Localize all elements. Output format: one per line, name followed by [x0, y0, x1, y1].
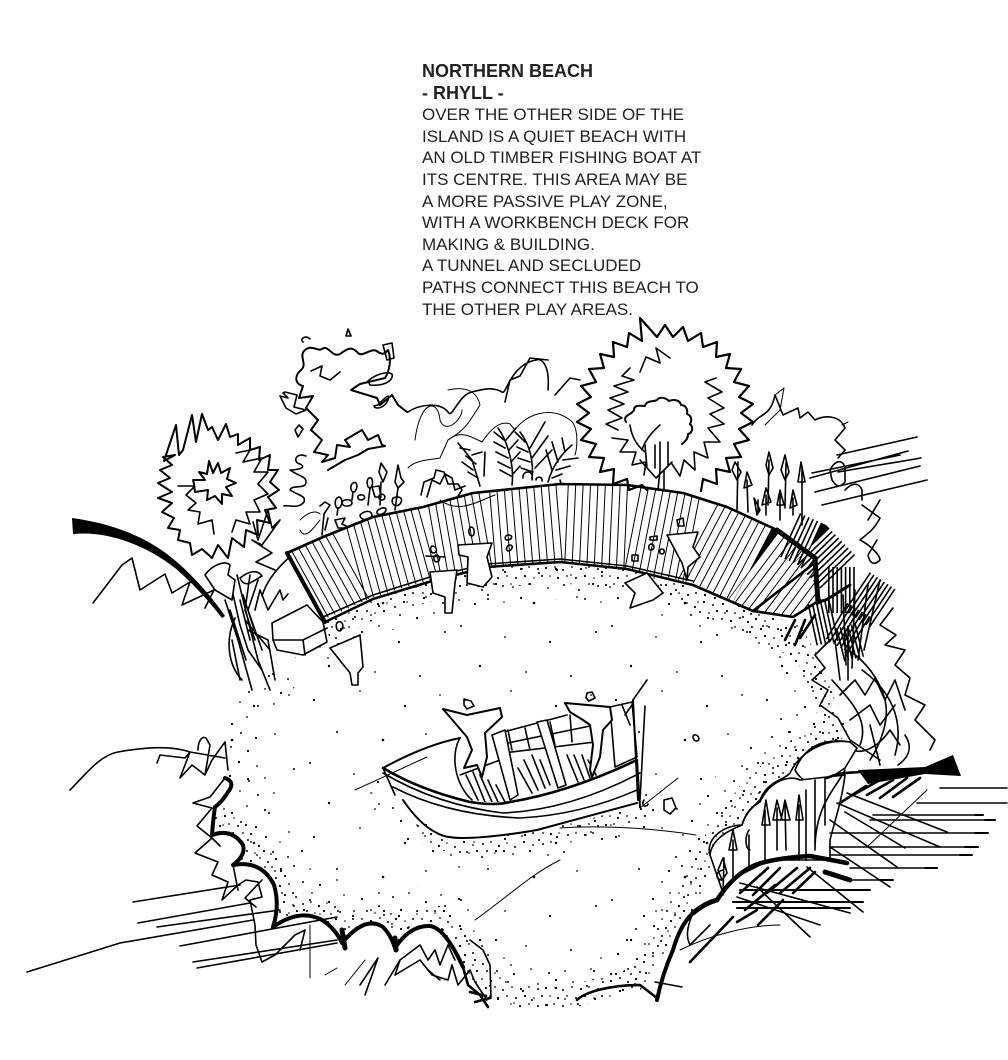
- horizontal shadow lines: right of upper bush: [810, 437, 927, 563]
- shrubs: right edge of beach: [795, 608, 935, 783]
- timber wall with vertical boards: [287, 484, 820, 622]
- figures on the wall and sand: [330, 518, 700, 685]
- text block: Northern Beach description: PATHS CONNECT THIS BEACH TO: [422, 278, 699, 297]
- text block: Northern Beach description: AN OLD TIMBER FISHING BOAT AT: [422, 148, 701, 167]
- text block: Northern Beach description: ISLAND IS A QUIET BEACH WITH: [422, 127, 686, 146]
- text block: Northern Beach description: [422, 61, 701, 319]
- text block: Northern Beach description: MAKING & BUILDING.: [422, 235, 595, 254]
- beach stipple: sparse interior, dense shore bands: [200, 560, 860, 1020]
- text block: Northern Beach description: OVER THE OTHER SIDE OF THE: [422, 105, 684, 124]
- timber fishing boat: [355, 680, 699, 920]
- text block: Northern Beach description: A TUNNEL AND SECLUDED: [422, 256, 641, 275]
- scribble shrubs: behind the wall, top centre: [408, 358, 580, 497]
- grass tuft: left of deck: [205, 563, 275, 690]
- thick branch: upper left: [72, 518, 225, 618]
- crosshatched thicket: lower right: [655, 741, 1007, 1000]
- text block: Northern Beach description: - RHYLL -: [422, 83, 504, 103]
- shrubs and spiked plants: upper right: [732, 388, 848, 525]
- text block: Northern Beach description: A MORE PASSIVE PLAY ZONE,: [422, 192, 668, 211]
- bench deck: left of wall: [252, 510, 327, 655]
- text block: Northern Beach description: ITS CENTRE. THIS AREA MAY BE: [422, 170, 687, 189]
- right spiky tree: [577, 318, 753, 491]
- text block: Northern Beach description: THE OTHER PLAY AREAS.: [422, 300, 633, 319]
- cloud tree: upper centre-left: [280, 329, 407, 506]
- sand lump: bottom edge: [577, 985, 657, 1000]
- text block: Northern Beach description: NORTHERN BEACH: [422, 61, 593, 81]
- text block: Northern Beach description: WITH A WORKBENCH DECK FOR: [422, 213, 689, 232]
- dark grasses: right side: [785, 535, 885, 680]
- shrub outline: lower left shore: [70, 737, 491, 1007]
- palm fronds: centre behind wall: [458, 422, 578, 500]
- horizontal shadow lines: lower left: [27, 885, 365, 985]
- garden flowers: left behind wall: [300, 463, 462, 535]
- left spiky tree: [158, 414, 279, 558]
